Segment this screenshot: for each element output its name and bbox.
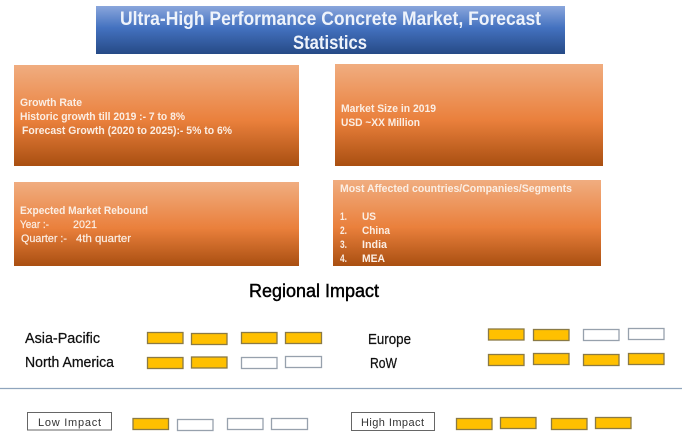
row: Asia-Pacific: Asia-Pacific [25, 331, 100, 347]
panel: expected market rebound: Year :- [20, 219, 49, 231]
row: North America [25, 355, 322, 371]
panel: most affected countries: 4. [340, 253, 347, 265]
row: North America: North America [25, 355, 115, 371]
panel: expected market rebound: 2021 [73, 219, 97, 231]
panel: market size: USD ~XX Million [341, 117, 420, 129]
row: Europe: Europe [368, 332, 411, 348]
row: RoW [370, 354, 664, 372]
row: Asia-Pacific [25, 331, 322, 347]
row: Europe [368, 328, 664, 348]
panel: most affected countries: India [362, 239, 388, 251]
panel: growth rate: Forecast Growth (2020 to 2025):- 5% to 6% [22, 125, 232, 137]
title banner: Statistics [293, 33, 367, 54]
panel: market size: Market Size in 2019 [341, 103, 436, 115]
title banner: Ultra-High Performance Concrete Market, Forecast [120, 9, 542, 30]
panel: most affected countries: 1. [340, 211, 347, 223]
panel: growth rate: Historic growth till 2019 :- 7 to 8% [20, 111, 185, 123]
panel: expected market rebound: Quarter :- [21, 233, 67, 245]
panel: market size [335, 64, 603, 166]
panel: most affected countries: US [362, 211, 376, 223]
panel: growth rate [14, 65, 299, 166]
heading: regional impact: Regional Impact [249, 280, 379, 301]
legend: high impact [352, 412, 631, 430]
legend: low impact [28, 412, 308, 430]
panel: most affected countries: Most Affected countries/Companies/Segments [340, 183, 572, 195]
panel: expected market rebound: Expected Market Rebound [20, 205, 148, 217]
panel: most affected countries: 2. [340, 225, 347, 237]
panel: expected market rebound [14, 182, 299, 266]
title banner [96, 6, 565, 54]
legend: low impact: Low Impact [38, 417, 101, 429]
panel: expected market rebound: 4th quarter [76, 233, 131, 245]
row: RoW: RoW [370, 356, 397, 372]
panel: most affected countries: China [362, 225, 391, 237]
panel: most affected countries [333, 180, 601, 266]
panel: most affected countries: MEA [362, 253, 385, 265]
panel: most affected countries: 3. [340, 239, 347, 251]
panel: growth rate: Growth Rate [20, 97, 82, 109]
legend: high impact: High Impact [361, 417, 424, 429]
